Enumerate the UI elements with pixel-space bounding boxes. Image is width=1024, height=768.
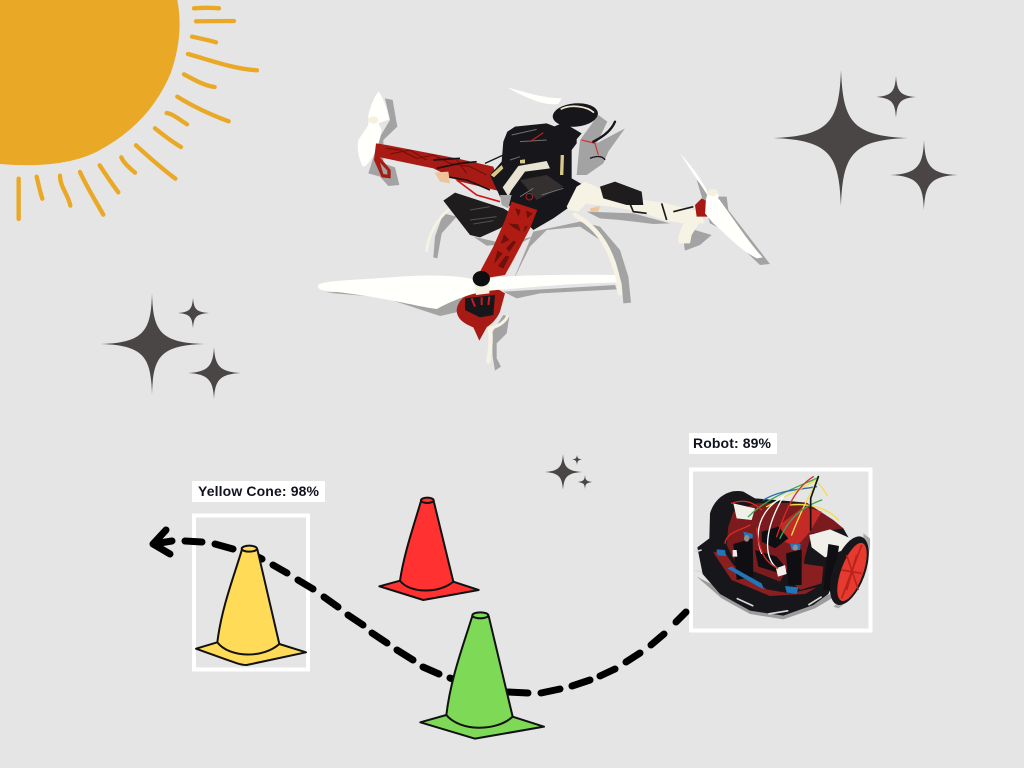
- icon: small sparkle top right: [876, 76, 916, 118]
- robot photo: [695, 477, 877, 619]
- motor and mount: [457, 288, 505, 341]
- green cone: [420, 612, 544, 739]
- front arm: [480, 202, 537, 277]
- right arm: [587, 182, 707, 243]
- battery: [443, 193, 517, 237]
- motor housing: [733, 503, 851, 591]
- front foot: [488, 317, 507, 362]
- chassis edge pins: [695, 550, 822, 614]
- robot shadow: [697, 577, 832, 619]
- front wheel: [822, 531, 877, 610]
- battery text: [470, 207, 497, 224]
- drone photo: [318, 87, 770, 371]
- label: yellow cone: [192, 481, 325, 502]
- dashed path: [185, 541, 686, 693]
- label: yellow cone: Yellow Cone: 98%: [198, 483, 320, 499]
- icon: large sparkle left: [100, 293, 205, 395]
- upper hubs: [368, 116, 718, 196]
- robot silhouette: [697, 491, 850, 616]
- label: robot: [689, 433, 777, 454]
- left arm: [374, 143, 502, 202]
- icon: medium sparkle top right: [890, 140, 958, 210]
- drone shadow: [326, 98, 770, 371]
- detection box: yellow cone: [194, 516, 308, 670]
- red cone: [379, 498, 479, 600]
- central frame: [490, 123, 605, 230]
- arrow head: [153, 530, 172, 554]
- propeller hub: [473, 271, 490, 295]
- sensors: [717, 532, 802, 594]
- icon: small sparkle left: [178, 298, 209, 328]
- landing gear: [427, 210, 620, 293]
- GPS puck: [485, 101, 615, 163]
- right propeller: [680, 153, 763, 258]
- left propeller: [358, 91, 389, 167]
- label: robot: Robot: 89%: [693, 435, 772, 451]
- icon: sun: [0, 0, 257, 219]
- icon: large sparkle top right: [773, 70, 908, 206]
- icon: sparkle cluster centre: [545, 454, 592, 490]
- jumper wires: [725, 477, 838, 568]
- detection box: robot: [691, 470, 870, 630]
- chassis: [713, 503, 843, 596]
- front propeller: [318, 275, 617, 309]
- far propeller: [507, 87, 562, 104]
- icon: medium sparkle left: [188, 347, 241, 399]
- yellow cone: [196, 546, 306, 665]
